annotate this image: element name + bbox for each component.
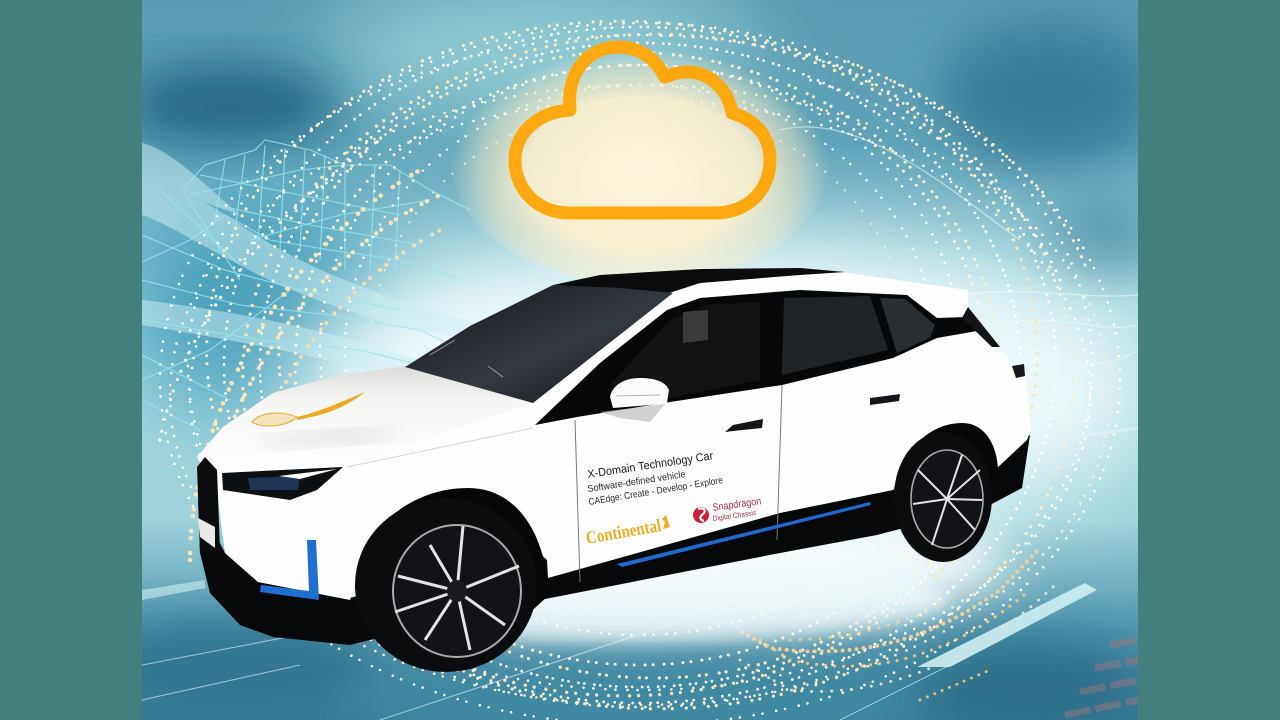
software-defined text: Software-defined vehicle	[587, 469, 686, 495]
rear quarter window	[880, 298, 935, 353]
grille	[197, 457, 220, 553]
Snapdragon text: Snapdragon	[712, 495, 762, 514]
door handle front	[725, 419, 763, 432]
Snapdragon logo mark	[693, 507, 709, 523]
Continental logo: Continental	[584, 515, 663, 548]
rear door window	[782, 296, 888, 375]
rear wheel	[894, 432, 992, 562]
blue sill stripe	[617, 502, 871, 567]
front door window	[610, 302, 760, 398]
CAEdge text: CAEdge: Create - Develop - Explore	[588, 475, 724, 508]
front wheel	[355, 498, 537, 672]
car white body	[197, 268, 1031, 600]
car lower black trim	[198, 435, 1030, 645]
side mirror	[600, 378, 669, 422]
windshield	[405, 285, 673, 403]
blue bumper accent	[260, 540, 319, 600]
front wheel arch	[355, 488, 549, 640]
licence plate	[198, 518, 215, 548]
black roof	[553, 268, 845, 295]
light road stripes	[142, 580, 1097, 667]
headlight	[222, 467, 343, 500]
wireframe waves right	[780, 127, 1138, 375]
translucent wave ribbons	[142, 143, 476, 370]
door handle rear	[870, 394, 900, 405]
Digital Chassis text: Digital Chassis	[712, 508, 757, 523]
tail light	[1012, 364, 1025, 378]
car name text: X-Domain Technology Car	[587, 450, 714, 481]
right teal side bar	[1138, 0, 1280, 720]
pink floor tiles corner	[1065, 640, 1138, 715]
spoiler fin	[962, 307, 1000, 347]
Continental horse mark	[662, 515, 670, 529]
side window frame	[535, 290, 977, 425]
hood gold reflection	[252, 392, 365, 426]
dotted particle swirl	[160, 0, 1120, 720]
door branding text	[584, 450, 762, 548]
wireframe mountains	[142, 140, 470, 430]
hood shading	[197, 366, 533, 472]
left teal side bar	[0, 0, 142, 720]
floor lines	[142, 428, 1138, 720]
car ground glow	[290, 560, 950, 640]
door seams	[575, 385, 782, 582]
icon: glowing cloud	[450, 35, 830, 285]
car: white SUV with technology branding	[197, 268, 1031, 672]
rear wheel arch	[893, 423, 998, 545]
hood crease	[347, 428, 533, 467]
